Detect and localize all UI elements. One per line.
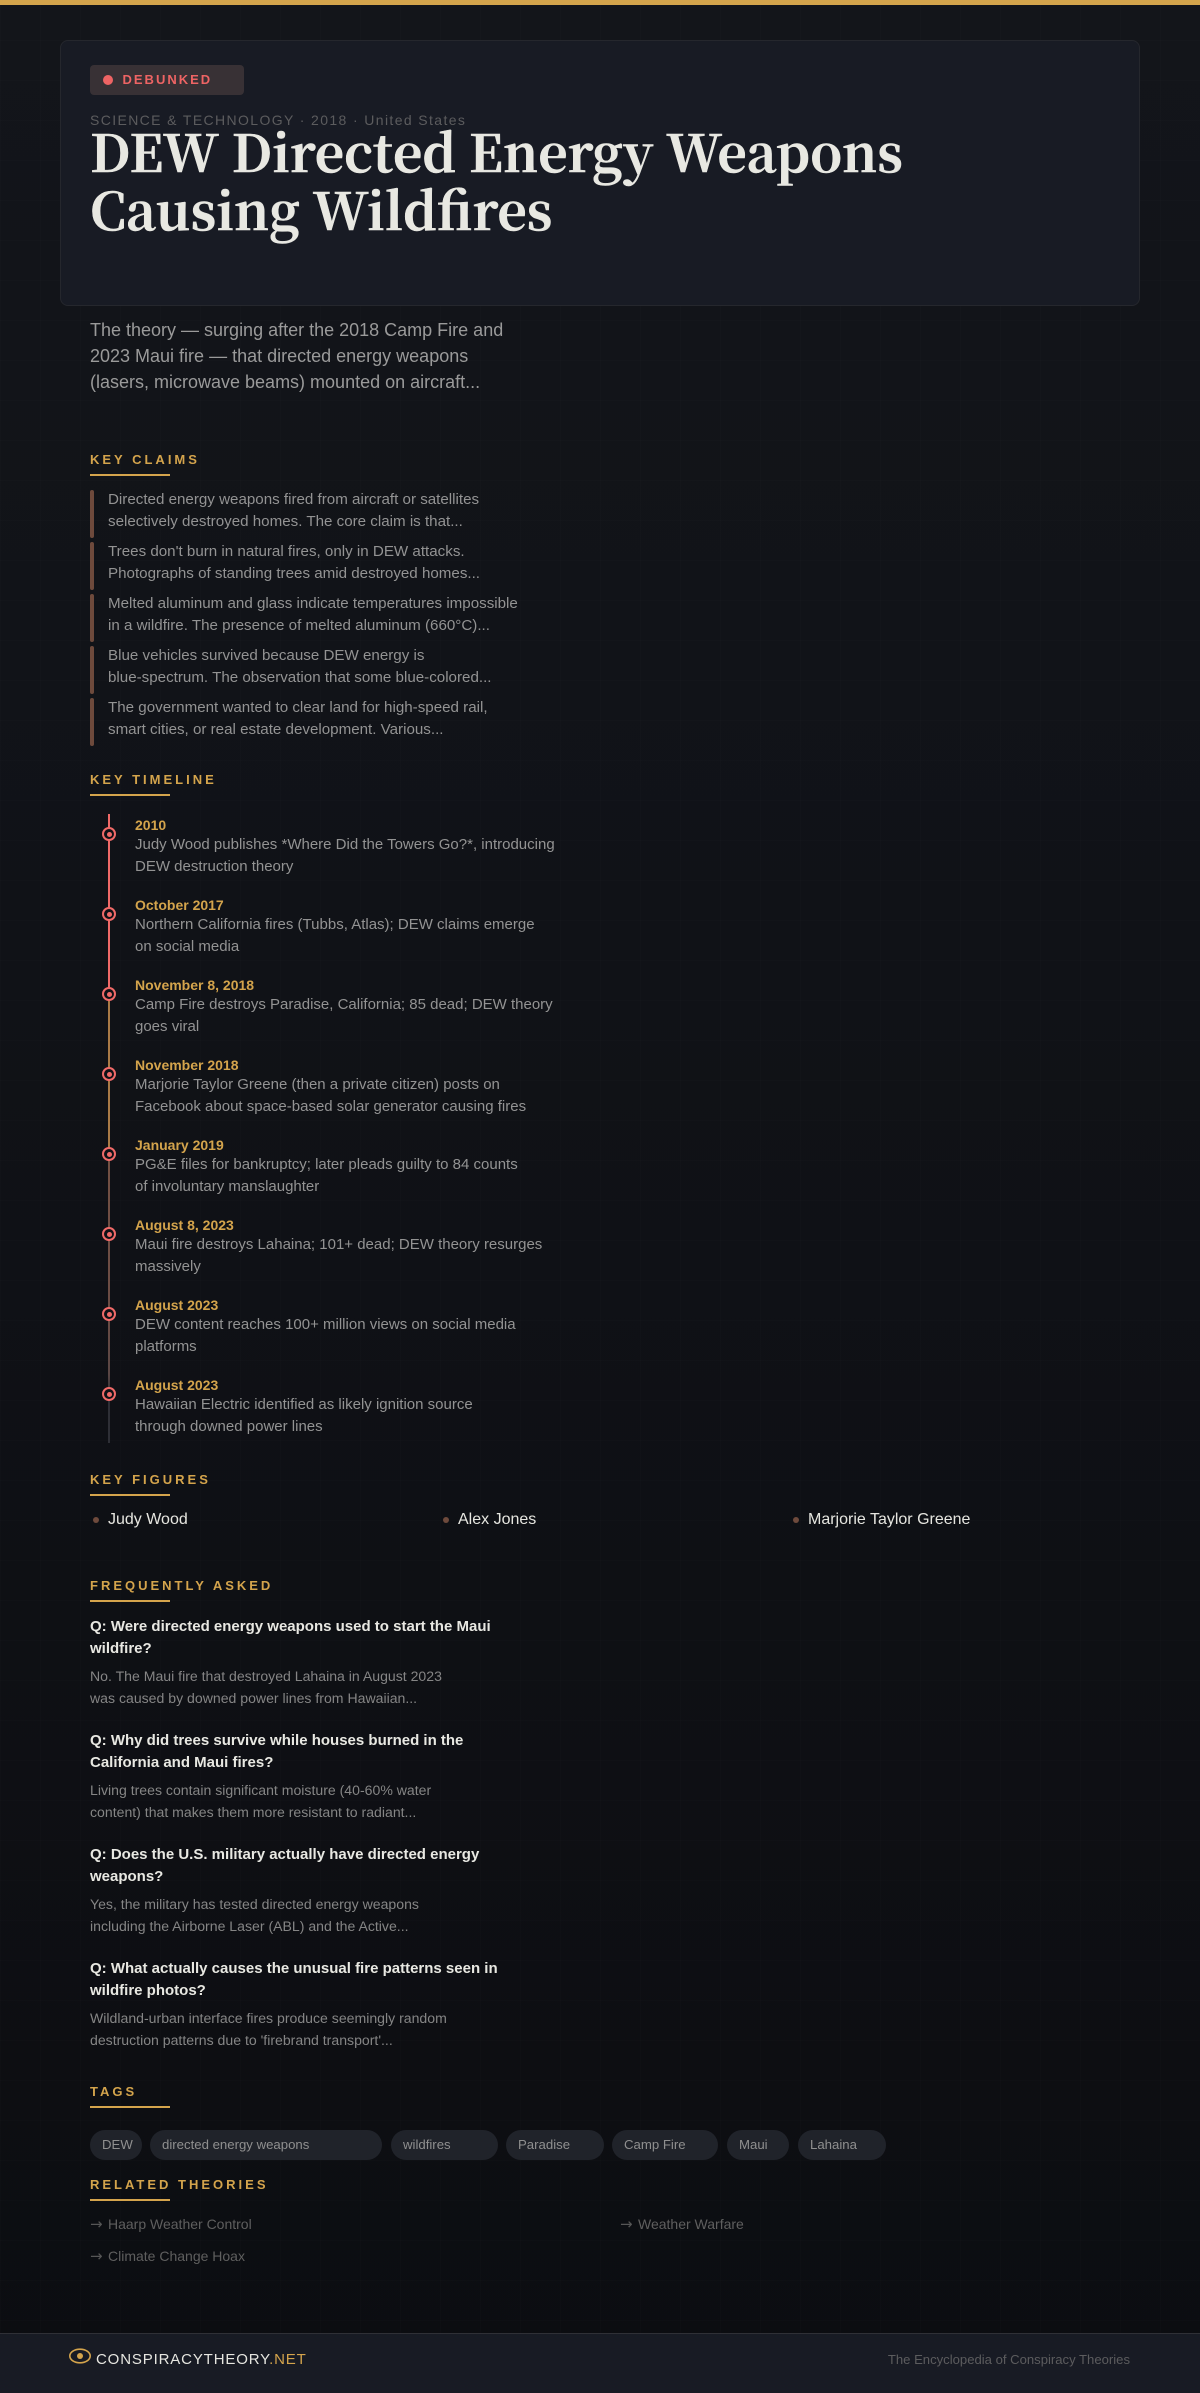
- event: August 8, 2023: Maui fire destroys Lahaina; 101+ dead; DEW theory resurges: [135, 1236, 542, 1253]
- event: 2010: [102, 817, 555, 875]
- FAQ item 1: [90, 1618, 491, 1706]
- FAQ item 2: Living trees contain significant moisture (40-60% water: [90, 1782, 431, 1798]
- timeline line: [108, 814, 110, 1443]
- event: October 2017: [102, 897, 535, 955]
- panel: claims list: [90, 490, 518, 746]
- tag: directed energy weapons: [150, 2130, 382, 2160]
- intro text: 2023 Maui fire — that directed energy weapons: [90, 346, 468, 366]
- claim 2: Photographs of standing trees amid destroyed homes...: [108, 565, 480, 582]
- claim 2: [90, 542, 480, 590]
- FAQ item 3: including the Airborne Laser (ABL) and the Active...: [90, 1918, 409, 1934]
- figure: Marjorie Taylor Greene: Marjorie Taylor Greene: [808, 1511, 970, 1528]
- logo wordmark: CONSPIRACYTHEORY.NET: [96, 2351, 307, 2368]
- FAQ item 3: Yes, the military has tested directed energy weapons: [90, 1896, 419, 1912]
- event: August 2023 views: [102, 1297, 516, 1355]
- FAQ item 4: Wildland-urban interface fires produce seemingly random: [90, 2010, 447, 2026]
- tag list: [90, 2130, 886, 2160]
- FAQ item 1: wildfire?: [90, 1640, 152, 1657]
- intro text: The theory — surging after the 2018 Camp Fire and: [90, 320, 503, 340]
- claim 1: [90, 490, 479, 538]
- FAQ item 1: was caused by downed power lines from Hawaiian...: [90, 1690, 417, 1706]
- event: 2010: 2010: [135, 817, 166, 833]
- FAQ list: Q: Why did trees survive while houses burned in the: [90, 1732, 463, 1749]
- badge label: DEBUNKED: [122, 72, 212, 87]
- claim 2: Trees don't burn in natural fires, only in DEW attacks.: [108, 543, 465, 560]
- intro text: (lasers, microwave beams) mounted on aircraft...: [90, 372, 480, 392]
- tag: Camp Fire: Camp Fire: [624, 2137, 686, 2152]
- claim 3: [90, 594, 518, 642]
- FAQ item 2: [90, 1732, 463, 1820]
- icon: eye logo: [69, 2348, 91, 2364]
- claim 3: Melted aluminum and glass indicate temperatures impossible: [108, 595, 518, 612]
- claim 5: [90, 698, 488, 746]
- tag: wildfires: [391, 2130, 498, 2160]
- event: January 2019: PG&E files for bankruptcy; later pleads guilty to 84 counts: [135, 1156, 518, 1173]
- claim 5: The government wanted to clear land for high-speed rail,: [108, 699, 488, 716]
- tag: wildfires: wildfires: [403, 2137, 451, 2152]
- event: January 2019: January 2019: [135, 1137, 224, 1153]
- claim 5: smart cities, or real estate development. Various...: [108, 721, 443, 738]
- title: [90, 112, 903, 244]
- related link: Haarp Weather Control: →: [90, 2215, 103, 2233]
- status badge: debunked: [90, 65, 244, 95]
- event: January 2019: of involuntary manslaughter: [135, 1178, 319, 1195]
- text: Q: Were directed energy weapons used to start the Maui: [90, 1618, 491, 1635]
- claim 4: [90, 646, 491, 694]
- FAQ item 4: [90, 1960, 498, 2048]
- figure: Alex Jones: Alex Jones: [458, 1511, 536, 1528]
- meta line: SCIENCE & TECHNOLOGY · 2018 · United States: [90, 112, 466, 128]
- event: August 2023 ignition: August 2023: [135, 1377, 218, 1393]
- related link: Haarp Weather Control: Haarp Weather Control: [108, 2216, 252, 2232]
- event: August 2023 ignition: through downed power lines: [135, 1418, 323, 1435]
- heading: key claims: KEY CLAIMS: [90, 452, 200, 467]
- FAQ item 1: No. The Maui fire that destroyed Lahaina in August 2023: [90, 1668, 442, 1684]
- tag: Lahaina: Lahaina: [810, 2137, 857, 2152]
- event: November 2018: Facebook about space-based solar generator causing fires: [135, 1098, 526, 1115]
- tag: directed energy weapons: directed energy weapons: [162, 2137, 309, 2152]
- claim 3: in a wildfire. The presence of melted aluminum (660°C)...: [108, 617, 490, 634]
- event: August 2023 ignition: Hawaiian Electric identified as likely ignition source: [135, 1396, 473, 1413]
- event: October 2017: on social media: [135, 938, 239, 955]
- tag: Maui: Maui: [739, 2137, 768, 2152]
- event: November 8, 2018: November 8, 2018: [135, 977, 254, 993]
- figure: Judy Wood: Judy Wood: [108, 1511, 188, 1528]
- event: November 2018: Marjorie Taylor Greene (then a private citizen) posts on: [135, 1076, 500, 1093]
- tag: Lahaina: [798, 2130, 886, 2160]
- FAQ item 4: wildfire photos?: [90, 1982, 206, 1999]
- event: November 8, 2018: goes viral: [135, 1018, 199, 1035]
- heading: related theories: RELATED THEORIES: [90, 2177, 268, 2192]
- FAQ list: [90, 1618, 498, 2048]
- FAQ item 4: destruction patterns due to 'firebrand transport'...: [90, 2032, 393, 2048]
- event: August 2023 views: DEW content reaches 100+ million views on social media: [135, 1316, 516, 1333]
- event: October 2017: October 2017: [135, 897, 224, 913]
- event: August 2023 ignition: [102, 1377, 473, 1435]
- related link: Climate Change Hoax: →: [90, 2247, 103, 2265]
- FAQ item 2: California and Maui fires?: [90, 1754, 273, 1771]
- tag: DEW: DEW: [102, 2137, 133, 2152]
- heading: frequently asked: FREQUENTLY ASKED: [90, 1578, 273, 1593]
- related link: Weather Warfare: →: [620, 2215, 633, 2233]
- event: August 2023 views: platforms: [135, 1338, 197, 1355]
- event: November 8, 2018: [102, 977, 553, 1035]
- related link: Climate Change Hoax: Climate Change Hoax: [108, 2248, 245, 2264]
- FAQ list: Q: What actually causes the unusual fire patterns seen in: [90, 1960, 498, 1977]
- tag: Paradise: Paradise: [518, 2137, 570, 2152]
- event: August 2023 views: August 2023: [135, 1297, 218, 1313]
- claim 1: selectively destroyed homes. The core claim is that...: [108, 513, 463, 530]
- event: August 8, 2023: [102, 1217, 542, 1275]
- event: 2010: Judy Wood publishes *Where Did the Towers Go?*, introducing: [135, 836, 555, 853]
- footer tagline: The Encyclopedia of Conspiracy Theories: [888, 2352, 1130, 2367]
- event: August 8, 2023: massively: [135, 1258, 201, 1275]
- icon: status dot: [103, 75, 113, 85]
- FAQ item 2: content) that makes them more resistant to radiant...: [90, 1804, 416, 1820]
- event: January 2019: [102, 1137, 518, 1195]
- heading: key figures: KEY FIGURES: [90, 1472, 211, 1487]
- tag: Camp Fire: [612, 2130, 718, 2160]
- top accent bar: [0, 0, 1200, 5]
- event: August 8, 2023: August 8, 2023: [135, 1217, 234, 1233]
- event: November 2018: [102, 1057, 526, 1115]
- claim 4: blue-spectrum. The observation that some blue-colored...: [108, 669, 491, 686]
- claim 4: Blue vehicles survived because DEW energy is: [108, 647, 424, 664]
- event: October 2017: Northern California fires (Tubbs, Atlas); DEW claims emerge: [135, 916, 535, 933]
- timeline: [102, 814, 555, 1443]
- title: Causing Wildfires: [90, 170, 552, 244]
- event: November 8, 2018: Camp Fire destroys Paradise, California; 85 dead; DEW theory: [135, 996, 553, 1013]
- event: 2010: DEW destruction theory: [135, 858, 293, 875]
- tag: Maui: [727, 2130, 789, 2160]
- event: November 2018: November 2018: [135, 1057, 239, 1073]
- title: DEW Directed Energy Weapons: [90, 112, 903, 186]
- intro text: [90, 320, 503, 392]
- heading: tags: TAGS: [90, 2084, 137, 2099]
- related link: Weather Warfare: Weather Warfare: [638, 2216, 744, 2232]
- panel: hero: [60, 40, 1140, 306]
- FAQ list: Q: Does the U.S. military actually have directed energy: [90, 1846, 479, 1863]
- FAQ item 3: weapons?: [90, 1868, 163, 1885]
- tag: Paradise: [506, 2130, 604, 2160]
- tag: DEW: [90, 2130, 142, 2160]
- FAQ item 3: [90, 1846, 480, 1934]
- heading: key timeline: KEY TIMELINE: [90, 772, 217, 787]
- claim 1: Directed energy weapons fired from aircraft or satellites: [108, 491, 479, 508]
- footer: [0, 2333, 1200, 2393]
